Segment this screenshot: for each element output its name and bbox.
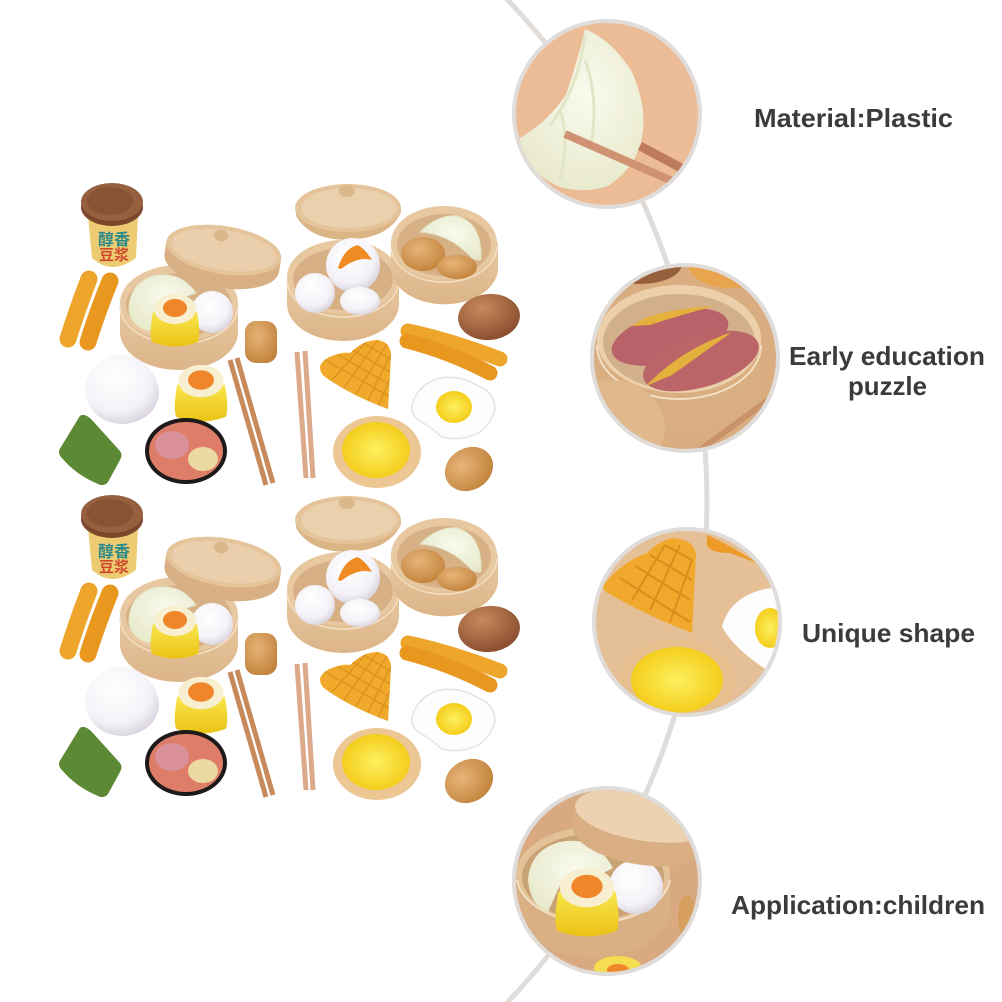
label: early education puzzle: puzzle (848, 371, 927, 401)
cup lettering copy: 醇香 (98, 542, 130, 561)
circle: dumpling detail (510, 15, 705, 210)
cup lettering lower line: 豆浆 (99, 246, 129, 264)
circle: open steamer with dumplings (512, 786, 702, 976)
label: early education puzzle (789, 341, 985, 401)
label: application: Application:children (731, 890, 985, 920)
cup lettering copy lower line: 豆浆 (99, 558, 129, 576)
connector curve (505, 0, 707, 1002)
cup lettering: 醇香 (98, 230, 130, 249)
label: material: Material:Plastic (754, 103, 953, 133)
circle: waffle, egg and tart (592, 527, 782, 717)
circle: sweet potato steamer (590, 263, 780, 453)
food set bottom (59, 495, 522, 812)
food set top (59, 183, 522, 500)
label: early education puzzle: Early education (789, 341, 985, 371)
label: unique shape: Unique shape (802, 618, 975, 648)
